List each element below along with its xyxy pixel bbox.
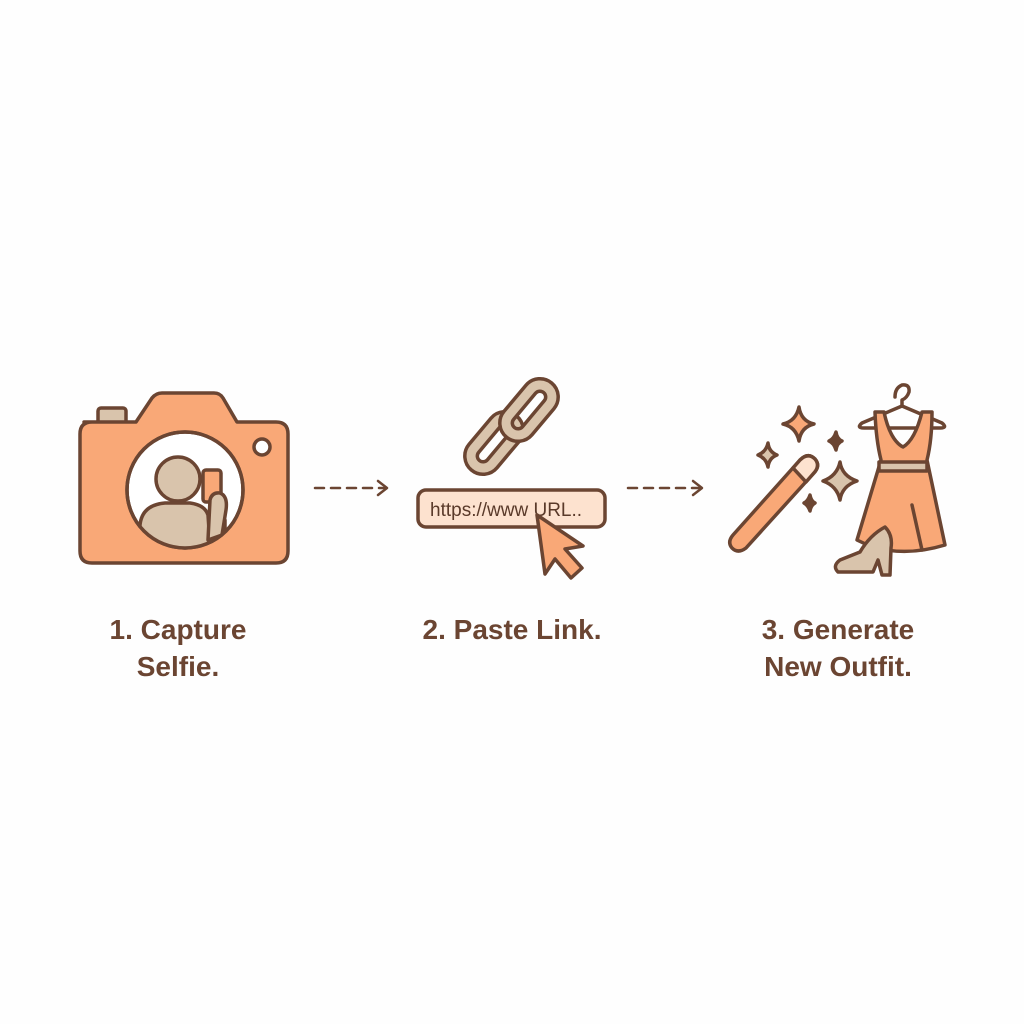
icon: cursor [537, 515, 583, 578]
label 1: Selfie. [137, 651, 219, 682]
arrow 1 [315, 481, 387, 495]
label 3 [762, 614, 914, 682]
icon: magic wand [730, 456, 818, 551]
label 3: New Outfit. [764, 651, 912, 682]
url bar: https://www URL.. [430, 500, 582, 521]
illustration [78, 377, 947, 580]
icon: camera [80, 393, 288, 563]
label 2: 2. Paste Link. [423, 614, 601, 645]
icon: high heel [835, 527, 891, 575]
sparkles [758, 407, 857, 511]
icon: chain link [466, 380, 557, 473]
label 1: 1. Capture [110, 614, 246, 645]
icon: dress on hanger [857, 385, 945, 551]
arrow 2 [628, 481, 702, 495]
label 3: 3. Generate [762, 614, 914, 645]
label 1 [110, 614, 246, 682]
url bar [418, 490, 605, 527]
